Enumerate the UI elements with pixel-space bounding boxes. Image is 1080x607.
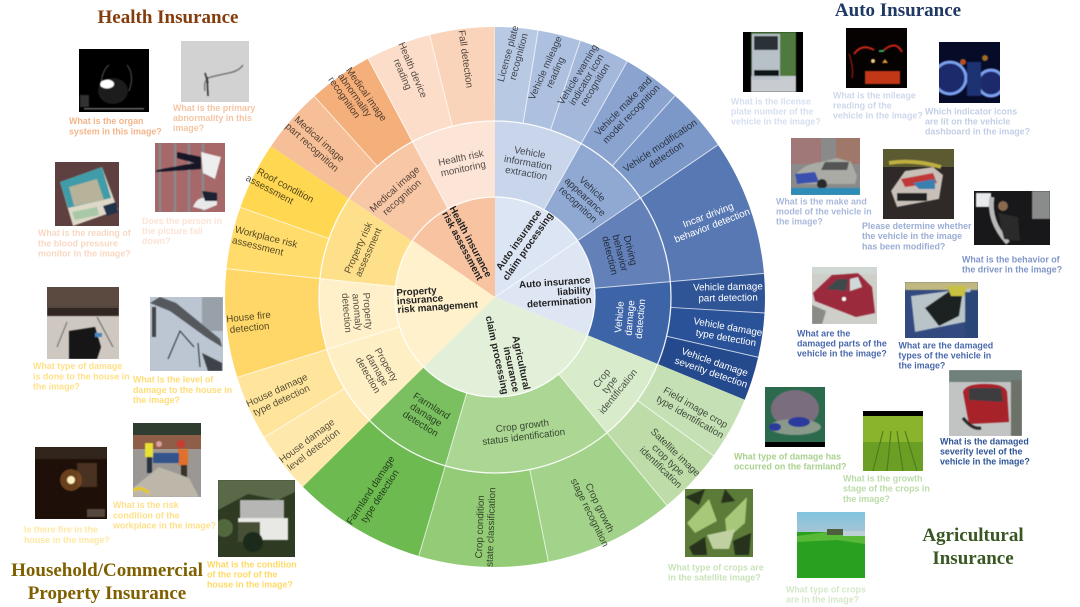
question: satellite crops: in the satellite image? <box>668 572 761 582</box>
middle ring segments <box>357 159 633 435</box>
photo: damaged severity red car <box>949 370 1022 436</box>
label: License plate recognition: recognition <box>508 32 531 81</box>
photo: rice growth stage <box>863 411 923 471</box>
label: Vehicle damage type detection: Vehicle damage <box>692 316 764 339</box>
label: Crop growth status identification: status identification <box>482 427 566 448</box>
label: Incar driving behavior detection: Incar driving <box>682 201 735 230</box>
label: Health device reading: reading <box>391 57 413 92</box>
question: roof condition: What is the condition <box>207 560 297 570</box>
label: Property insurance risk management: insurance <box>397 293 444 307</box>
label: Vehicle damage detection: detection <box>634 299 648 339</box>
photo: green rice field <box>797 512 865 578</box>
question: damaged parts: What are the <box>797 328 850 338</box>
question: indicator icons: are lit on the vehicle <box>925 116 1010 126</box>
question: field crops: are in the image? <box>786 594 859 604</box>
label: Satellite image crop type identification: identification <box>637 445 684 491</box>
question: organ system: system in this image? <box>69 126 162 136</box>
label: Crop type identification: Crop <box>591 367 614 390</box>
label: Agricultural insurance claim processing: insurance <box>501 346 521 394</box>
question: damage type house: the image? <box>33 382 80 392</box>
label: Crop growth stage recognition: stage recognition <box>568 477 610 549</box>
question: damage level house: the image? <box>133 395 180 405</box>
label: Vehicle information extraction: extraction <box>504 165 548 183</box>
question: make and model: What is the make and <box>776 196 867 206</box>
photo: driver behaviour <box>974 191 1050 245</box>
label: Medical image abnormality recognition: abnormality <box>335 71 373 119</box>
label: Crop type identification: type <box>600 374 621 396</box>
label: Health risk monitoring: monitoring <box>440 159 487 179</box>
label: Property damage detection: Property <box>372 346 400 384</box>
label: Property insurance risk management: Property <box>396 285 438 299</box>
question: mileage: What is the mileage <box>833 90 916 100</box>
label: Vehicle appearance recognition: appearance <box>562 176 608 219</box>
label: Property anomaly detection: anomaly <box>349 293 364 331</box>
label: Health device reading: Health device <box>395 41 429 100</box>
photo: indicator icons <box>939 42 1000 103</box>
label: Incar driving behavior detection: behavior detection <box>673 207 752 246</box>
label: Property risk assessment: Property risk <box>343 221 375 276</box>
label: Vehicle appearance recognition: Vehicle <box>577 175 608 205</box>
label: Agricultural insurance claim processing: claim processing <box>483 315 510 396</box>
label: Driving behavior detection: behavior <box>610 234 630 273</box>
label: License plate recognition: License plate <box>496 24 522 83</box>
question: license plate: plate number of the <box>731 106 813 116</box>
question: fire: house in the image? <box>24 535 110 545</box>
question: mileage: reading of the <box>833 100 892 110</box>
label: Crop growth stage recognition: Crop growth <box>582 482 616 534</box>
question: workplace risk: condition of the <box>113 510 180 520</box>
question: blood pressure: monitor in the image? <box>38 248 131 258</box>
label: Vehicle warning indicator icon recognition: recognition <box>579 62 613 109</box>
label: Health insurance risk assessment: Health insurance <box>447 204 494 280</box>
label: Auto insurance liability determination: Auto insurance <box>519 275 591 291</box>
photo: workers on site <box>133 423 201 497</box>
photo: person fallen down <box>155 143 225 212</box>
label: Roof condition assessment: assessment <box>244 173 295 207</box>
photo: farmland damage satellite <box>765 387 825 447</box>
photo: damaged parts red car <box>812 267 877 324</box>
question: fire: Is there fire in the <box>24 524 98 534</box>
question: damage type house: What type of damage <box>33 361 122 371</box>
label: Medical image abnormality recognition: Medical image <box>343 66 389 124</box>
photo: roof aerial <box>218 480 295 557</box>
label: Vehicle make and model recognition: model recognition <box>601 83 662 146</box>
question: modified: has been modified? <box>862 242 945 252</box>
question: damaged types: What are the damaged <box>898 340 993 350</box>
label: Satellite image crop type identification: Satellite image <box>648 427 702 479</box>
question: driver behaviour: the driver in the image? <box>962 264 1062 274</box>
question: satellite crops: What type of crops are <box>668 562 764 572</box>
label: Medical image part recognition: Medical image <box>292 114 347 165</box>
label: Agricultural insurance claim processing: Agricultural <box>509 335 532 391</box>
question: damaged parts: damaged parts of the <box>797 338 887 348</box>
question: damaged severity: vehicle in the image? <box>940 456 1030 466</box>
question: fall down: the picture fall <box>142 226 203 236</box>
label: Property anomaly detection: detection <box>339 293 353 333</box>
photo: angiogram <box>181 41 249 102</box>
photo: van license plate <box>743 32 803 92</box>
title: Agricultural Insurance: Insurance <box>932 548 1014 569</box>
inner ring segments <box>445 247 545 347</box>
label: Field image crop type identification: Field image crop <box>661 385 730 431</box>
sunburst chart <box>226 24 765 567</box>
title: Household/Commercial Property Insurance: Property Insurance <box>28 583 186 604</box>
label: Vehicle damage severity detection: severity detection <box>673 356 749 391</box>
label: Fall detection: Fall detection <box>456 30 475 89</box>
label: Field image crop type identification: type identification <box>654 394 725 441</box>
label: Crop type identification: identification <box>597 367 640 417</box>
question: organ system: What is the organ <box>69 116 143 126</box>
question: primary abnormality: What is the primary <box>173 103 255 113</box>
question: workplace risk: workplace in the image? <box>112 520 216 530</box>
label: Vehicle information extraction: Vehicle <box>513 145 547 161</box>
photo: organ scan <box>79 49 149 112</box>
question: damaged severity: What is the damaged <box>940 436 1029 446</box>
label: Vehicle mileage reading: Vehicle mileage <box>527 34 565 102</box>
label: House damage type detection: type detection <box>252 383 312 419</box>
label: Medical image recognition: Medical image <box>368 164 423 215</box>
question: growth stage: stage of the crops in <box>843 484 930 494</box>
label: Vehicle damage part detection: part detection <box>698 292 758 305</box>
question: driver behaviour: What is the behavior of <box>962 254 1060 264</box>
question: damage level house: What is the level of <box>133 374 213 384</box>
question: fall down: Does the person in <box>142 216 222 226</box>
question: indicator icons: dashboard in the image? <box>925 126 1030 136</box>
photo: wall crack <box>150 297 223 371</box>
question: damage level house: damage to the house in <box>133 385 232 395</box>
label: Workplace risk assessment: assessment <box>231 235 285 259</box>
photo: sedan make and model <box>791 138 860 195</box>
label: House damage type detection: House damage <box>245 372 310 410</box>
label: Vehicle mileage reading: reading <box>544 55 568 90</box>
label: Auto insurance claim processing: Auto insurance <box>494 208 545 273</box>
photo: modified car <box>883 149 954 219</box>
photo: mileage dashboard <box>846 28 907 88</box>
label: House fire detection: detection <box>229 321 270 336</box>
photo: satellite crop <box>685 489 753 557</box>
question: fall down: down? <box>142 236 171 246</box>
label: Property damage detection: detection <box>353 356 382 395</box>
title: Agricultural Insurance: Agricultural <box>922 525 1024 546</box>
photo: blood pressure monitor <box>55 162 119 226</box>
question: damage type house: is done to the house in <box>33 372 130 382</box>
label: Vehicle modification detection: Vehicle modification <box>622 117 699 175</box>
label: Farmland damage type detection: type detection <box>359 468 402 525</box>
label: Medical image recognition: recognition <box>381 178 424 218</box>
question: workplace risk: What is the risk <box>113 500 179 510</box>
question: license plate: What is the license <box>731 96 811 106</box>
label: Property insurance risk management: risk management <box>397 299 479 316</box>
label: Health risk monitoring: Health risk <box>437 148 485 169</box>
label: Vehicle damage detection: damage <box>623 299 638 336</box>
photo: broken window <box>905 282 978 338</box>
label: Medical image part recognition: part recognition <box>283 121 340 175</box>
label: Farmland damage detection: Farmland <box>411 391 452 422</box>
question: roof condition: house in the image? <box>207 580 293 590</box>
label: House fire detection: House fire <box>226 310 272 325</box>
question: damaged types: types of the vehicle in <box>898 350 991 360</box>
question: damaged types: the image? <box>898 360 945 370</box>
label: Vehicle appearance recognition: recognition <box>556 185 599 225</box>
question: blood pressure: the blood pressure <box>38 238 118 248</box>
label: Vehicle warning indicator icon recognition: Vehicle warning <box>556 43 601 107</box>
question: farmland damage: occurred on the farmland? <box>734 462 846 472</box>
question: license plate: vehicle in the image? <box>731 116 821 126</box>
title: Household/Commercial Property Insurance: Household/Commercial <box>11 560 203 581</box>
label: Property anomaly detection: Property <box>360 292 374 330</box>
label: Crop condition state classification: state classification <box>485 487 498 567</box>
label: Health insurance risk assessment: risk assessment <box>439 210 485 283</box>
question: roof condition: of the roof of the <box>207 570 278 580</box>
label: Farmland damage detection: detection <box>400 409 440 440</box>
question: farmland damage: What type of damage has <box>734 452 841 462</box>
label: Roof condition assessment: Roof condition <box>255 166 315 206</box>
label: Auto insurance liability determination: liability <box>557 285 592 298</box>
photo: house fire <box>35 447 107 519</box>
label: Vehicle damage detection: Vehicle <box>613 300 627 333</box>
label: Driving behavior detection: Driving <box>621 234 639 267</box>
question: modified: Please determine whether <box>862 221 972 231</box>
question: make and model: model of the vehicle in <box>776 206 872 216</box>
label: Farmland damage type detection: Farmland damage <box>345 454 398 527</box>
title: Auto Insurance: Auto Insurance <box>835 0 961 21</box>
label: Vehicle information extraction: information <box>503 154 553 173</box>
label: Property damage detection: damage <box>363 352 390 389</box>
question: make and model: the image? <box>776 216 823 226</box>
question: damaged parts: vehicle in the image? <box>797 348 887 358</box>
question: damaged severity: severity level of the <box>940 446 1022 456</box>
label: Vehicle make and model recognition: Vehicle make and <box>593 75 655 139</box>
question: blood pressure: What is the reading of <box>38 228 131 238</box>
question: growth stage: What is the growth <box>843 474 922 484</box>
label: Crop growth status identification: Crop growth <box>495 418 550 435</box>
label: Vehicle modification detection: detection <box>647 140 686 171</box>
label: House damage level detection: House damage <box>277 417 338 466</box>
label: Farmland damage detection: damage <box>408 401 444 430</box>
question: mileage: vehicle in the image? <box>833 110 923 120</box>
label: House damage level detection: level detection <box>286 427 342 473</box>
title: Health Insurance: Health Insurance <box>98 7 238 28</box>
label: Vehicle damage severity detection: Vehicle damage <box>680 346 750 379</box>
label: Auto insurance liability determination: determination <box>527 295 592 310</box>
question: modified: the vehicle in the image <box>862 231 962 241</box>
label: Auto insurance claim processing: claim processing <box>501 211 556 283</box>
label: Driving behavior detection: detection <box>599 235 619 276</box>
label: Crop condition state classification: Crop condition <box>474 495 487 559</box>
label: Vehicle warning indicator icon recognition: indicator icon <box>567 52 607 108</box>
label: Property risk assessment: assessment <box>353 226 385 279</box>
photo: house damage hole <box>47 287 119 359</box>
question: indicator icons: Which indicator icons <box>925 106 1017 116</box>
label: Vehicle damage part detection: Vehicle damage <box>693 281 763 294</box>
label: Workplace risk assessment: Workplace risk <box>234 225 299 251</box>
label: Vehicle damage type detection: type detection <box>695 328 757 349</box>
label: Medical image abnormality recognition: recognition <box>325 75 362 121</box>
question: growth stage: the image? <box>843 494 890 504</box>
label: Satellite image crop type identification: crop type <box>649 442 686 479</box>
outer ring segments <box>272 74 718 520</box>
question: primary abnormality: image? <box>173 123 204 133</box>
question: field crops: What type of crops <box>786 584 866 594</box>
question: primary abnormality: abnormality in this <box>173 113 252 123</box>
